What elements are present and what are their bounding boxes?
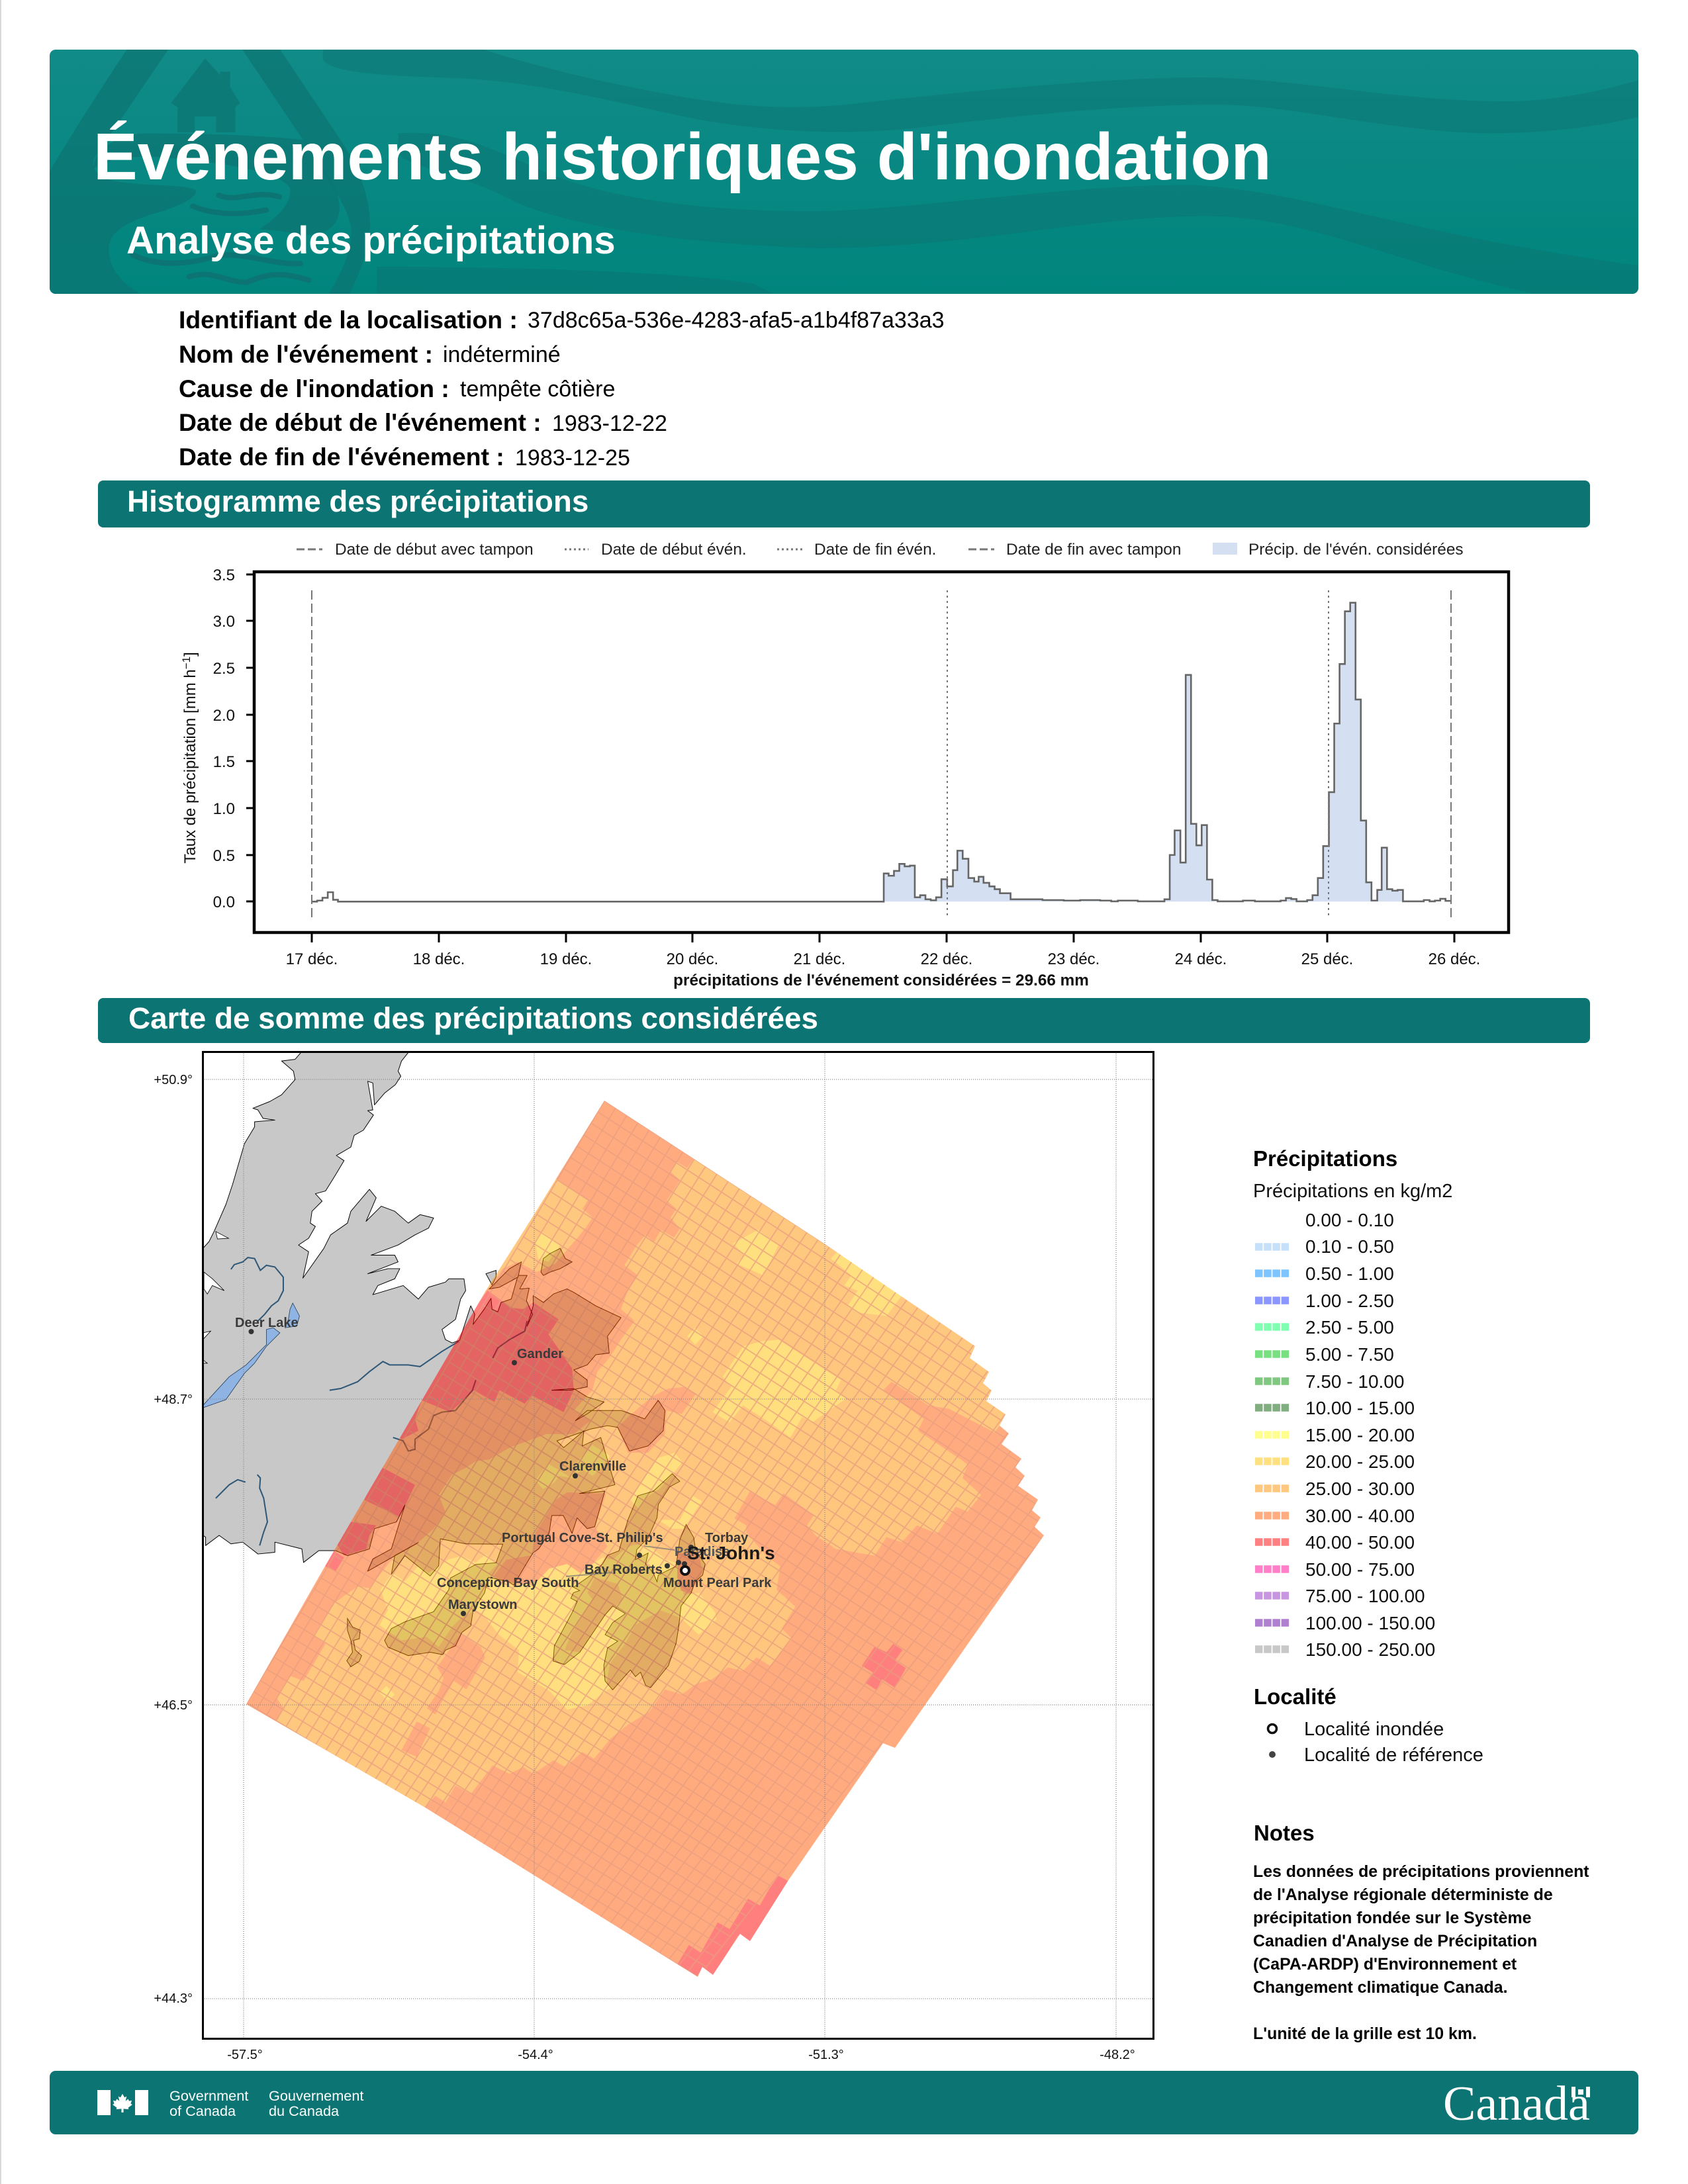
x axis labels: 17 déc.	[286, 950, 338, 968]
government wordmark	[169, 2087, 363, 2119]
y axis labels: 0.0	[213, 893, 235, 911]
gridded precipitation field	[246, 1101, 1044, 1977]
x axis labels: 21 déc.	[794, 950, 845, 968]
locality labels: Torbay	[705, 1531, 749, 1545]
leader lines	[566, 1546, 675, 1576]
legend: localité: Localité de référence	[1304, 1745, 1483, 1766]
event metadata block: 1983-12-22	[552, 411, 667, 436]
y axis labels	[213, 567, 235, 911]
event metadata block: tempête côtière	[460, 377, 615, 402]
chart legend: Date de début avec tampon	[335, 541, 534, 559]
notes: de l'Analyse régionale déterministe de	[1253, 1886, 1553, 1904]
map longitude labels: -57.5°	[227, 2048, 263, 2062]
locality labels: Deer Lake	[235, 1316, 299, 1330]
event date lines	[312, 590, 1451, 917]
total precipitation caption: précipitations de l'événement considérées = 29.66 mm	[673, 972, 1089, 989]
map latitude labels: +50.9°	[154, 1073, 193, 1087]
map longitude labels: -54.4°	[518, 2048, 553, 2062]
zone: 20-25 mm central	[379, 1445, 716, 1709]
notes: L'unité de la grille est 10 km.	[1253, 2025, 1477, 2043]
map latitude labels	[154, 1073, 193, 2006]
legend: precipitations: 150.00 - 250.00	[1305, 1639, 1435, 1660]
zone: 30-40 mm central	[491, 1492, 608, 1584]
map latitude labels: +46.5°	[154, 1698, 193, 1713]
zone: 40-50 mm east patches	[677, 1644, 906, 1978]
locality labels: Conception Bay South	[437, 1576, 579, 1590]
flooded locality marker	[681, 1567, 689, 1574]
legend: precipitations: 7.50 - 10.00	[1305, 1371, 1404, 1392]
event metadata block: Date de début de l'événement :	[179, 408, 541, 436]
chart frame and ticks	[254, 572, 1509, 933]
map latitude labels: +44.3°	[154, 1991, 193, 2006]
lakes	[203, 1303, 299, 1408]
government wordmark: Gouvernement	[269, 2087, 363, 2104]
map longitude labels: -51.3°	[808, 2048, 844, 2062]
x axis labels: 26 déc.	[1429, 950, 1480, 968]
chart legend: Précip. de l'évén. considérées	[1248, 541, 1464, 559]
notes: (CaPA-ARDP) d'Environnement et	[1253, 1955, 1517, 1974]
x axis labels: 18 déc.	[413, 950, 465, 968]
legend: precipitations: 0.50 - 1.00	[1305, 1263, 1394, 1284]
map frame	[203, 1052, 1153, 2038]
legend: precipitations: 75.00 - 100.00	[1305, 1586, 1425, 1606]
event metadata block: Nom de l'événement :	[179, 340, 433, 368]
x axis labels: 25 déc.	[1301, 950, 1353, 968]
x axis labels: 20 déc.	[667, 950, 718, 968]
legend: precipitations: Précipitations en kg/m2	[1253, 1181, 1452, 1202]
icon: canadian flag	[97, 2090, 148, 2115]
y axis labels: 3.5	[213, 567, 235, 584]
legend: precipitations: 0.10 - 0.50	[1305, 1236, 1394, 1257]
government wordmark: of Canada	[169, 2103, 236, 2119]
event metadata block: Identifiant de la localisation :	[179, 306, 518, 334]
section heading: histogramme: Histogramme des précipitations	[127, 484, 588, 518]
notes: Changement climatique Canada.	[1253, 1978, 1508, 1997]
y axis labels: 1.0	[213, 800, 235, 818]
y axis title: −1	[180, 657, 193, 669]
government wordmark: du Canada	[269, 2103, 340, 2119]
notes: Canadien d'Analyse de Précipitation	[1253, 1932, 1537, 1950]
chart legend: Date de fin avec tampon	[1006, 541, 1181, 559]
locality labels: Portugal Cove-St. Philip's	[502, 1531, 663, 1545]
government wordmark: Government	[169, 2087, 248, 2104]
y axis title: Taux de précipitation [mm h	[181, 669, 199, 864]
x axis labels: 19 déc.	[540, 950, 592, 968]
header banner	[46, 46, 1647, 297]
map latitude labels: +48.7°	[154, 1392, 193, 1407]
x axis labels: 24 déc.	[1175, 950, 1227, 968]
zone: 25-30 mm on Avalon	[565, 1577, 679, 1689]
legend: precipitations: 10.00 - 15.00	[1305, 1398, 1415, 1418]
panel: precipitation histogram chart	[180, 541, 1509, 989]
zone: 30-40 mm	[246, 1101, 1044, 1976]
event metadata block: 1983-12-25	[515, 445, 630, 471]
locality labels: Paradise	[675, 1545, 729, 1559]
event metadata block	[179, 306, 945, 471]
zone: 20-25 mm small west patches	[379, 1232, 703, 1702]
chart legend	[297, 541, 1464, 559]
locality labels: Gander	[517, 1347, 563, 1361]
chart legend: Date de fin évén.	[814, 541, 936, 559]
decorative wave bands	[323, 50, 1647, 297]
legend: precipitations: 1.00 - 2.50	[1305, 1291, 1394, 1311]
legend: localité	[1254, 1684, 1483, 1766]
locality labels: Bay Roberts	[585, 1563, 663, 1577]
canada wordmark: Canada	[1443, 2077, 1590, 2131]
y axis labels: 3.0	[213, 613, 235, 631]
zone: 40-50 mm	[324, 1291, 574, 1571]
y axis labels: 2.0	[213, 707, 235, 725]
notes: précipitation fondée sur le Système	[1253, 1909, 1532, 1927]
legend: precipitations: 15.00 - 20.00	[1305, 1425, 1415, 1445]
locality labels: Clarenville	[559, 1459, 626, 1474]
section heading: carte: Carte de somme des précipitations considérées	[128, 1001, 818, 1035]
locality labels: Mount Pearl Park	[663, 1576, 772, 1590]
precipitation bars	[312, 603, 1451, 901]
subtitle: Analyse des précipitations	[126, 219, 616, 262]
x axis labels	[286, 950, 1480, 968]
map longitude labels: -48.2°	[1100, 2048, 1135, 2062]
event metadata block: Cause de l'inondation :	[179, 375, 449, 402]
legend: precipitations: 40.00 - 50.00	[1305, 1532, 1415, 1553]
chart legend: Date de début évén.	[601, 541, 747, 559]
land base map	[203, 1052, 665, 1666]
y axis labels: 1.5	[213, 753, 235, 771]
legend: precipitations: 2.50 - 5.00	[1305, 1317, 1394, 1338]
legend: localité: Localité inondée	[1304, 1719, 1444, 1740]
locality labels	[235, 1316, 775, 1612]
legend: precipitations: 20.00 - 25.00	[1305, 1451, 1415, 1472]
legend: precipitations	[1253, 1146, 1452, 1660]
zone: 30-40 mm St. John's	[677, 1553, 702, 1594]
x axis labels: 23 déc.	[1048, 950, 1100, 968]
legend: precipitations: 30.00 - 40.00	[1305, 1506, 1415, 1526]
legend: precipitations: Précipitations	[1253, 1146, 1397, 1171]
footer bar	[50, 2071, 1638, 2134]
y axis labels: 0.5	[213, 847, 235, 865]
y axis title: ]	[181, 652, 199, 657]
event metadata block: Date de fin de l'événement :	[179, 443, 504, 471]
zone: 20-25 mm east patches	[687, 1230, 902, 1437]
legend: precipitations: 5.00 - 7.50	[1305, 1344, 1394, 1365]
section heading: histogramme	[98, 480, 1590, 527]
legend: precipitations: 50.00 - 75.00	[1305, 1559, 1415, 1580]
rivers	[216, 1257, 527, 1545]
locality markers	[249, 1329, 694, 1616]
locality labels: St. John's	[687, 1543, 775, 1563]
panel: precipitation map	[154, 1052, 1154, 2120]
legend: precipitations: 100.00 - 150.00	[1305, 1613, 1435, 1633]
x axis labels: 22 déc.	[921, 950, 972, 968]
cell grid lines	[247, 1101, 1122, 1977]
title: Événements historiques d'inondation	[93, 120, 1272, 194]
map longitude labels	[227, 2048, 1135, 2062]
y axis labels: 2.5	[213, 660, 235, 678]
section heading: carte	[98, 998, 1590, 1043]
legend: precipitations: 0.00 - 0.10	[1305, 1210, 1394, 1230]
event metadata block: indéterminé	[443, 342, 561, 367]
zone: 25-30 mm west patch	[486, 1179, 592, 1291]
notes: Les données de précipitations proviennent	[1253, 1862, 1589, 1881]
legend: precipitations: 25.00 - 30.00	[1305, 1479, 1415, 1499]
notes: Notes	[1254, 1821, 1315, 1845]
icon: flooded house watermark	[46, 46, 370, 296]
legend: localité: Localité	[1254, 1684, 1336, 1709]
notes	[1253, 1821, 1589, 2043]
event metadata block: 37d8c65a-536e-4283-afa5-a1b4f87a33a3	[528, 308, 945, 333]
locality labels: Marystown	[448, 1598, 517, 1612]
